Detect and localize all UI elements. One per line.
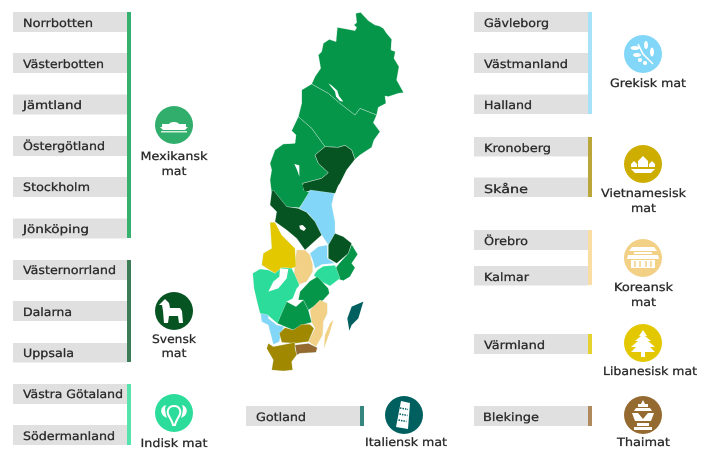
region: Västernorrland [303, 145, 355, 191]
heading: Mexikansk mat [140, 149, 208, 178]
heading: Grekisk mat: Grekisk mat [610, 76, 687, 90]
heading: Mexikansk mat: mat [162, 164, 187, 178]
heading: Koreansk mat: mat [631, 295, 657, 309]
label: Jämtland: Jämtland [22, 98, 82, 112]
region: Örebro [294, 250, 313, 284]
label: Gävleborg: Gävleborg [484, 16, 549, 30]
heading: Mexikansk mat: Mexikansk [140, 149, 208, 163]
label: Västmanland: Västmanland [484, 57, 568, 71]
heading: Vietnamesisk mat: mat [631, 201, 657, 215]
heading: Indisk mat: Indisk mat [140, 436, 208, 450]
icon: olive branch [624, 35, 662, 73]
icon: Indisk domes [155, 394, 193, 432]
map of Sweden [253, 12, 404, 371]
group: Vietnamesisk mat list [474, 137, 592, 197]
colour bar [360, 406, 364, 426]
group: Svensk mat list [13, 260, 131, 362]
region: Kronoberg [279, 324, 314, 343]
label: Kronoberg: Kronoberg [484, 141, 551, 155]
group: Grekisk mat list [474, 12, 592, 114]
colour bar [588, 137, 592, 197]
heading: Italiensk mat: Italiensk mat [365, 435, 448, 449]
region: Västmanland [310, 245, 335, 268]
region: Öland [324, 320, 333, 348]
icon: Korean palace [624, 239, 662, 277]
label: Värmland: Värmland [484, 338, 545, 352]
region: Gotland [347, 302, 363, 331]
region: Jämtland lower [271, 185, 309, 208]
heading: Vietnamesisk mat [601, 186, 686, 215]
heading: Libanesisk mat: Libanesisk mat [603, 364, 698, 378]
region: Östergötland [298, 277, 329, 310]
lake: Siljan [299, 225, 306, 231]
region: Halland [261, 313, 284, 344]
region: Stockholm [334, 244, 358, 281]
icon: Dalecarlian horse [155, 292, 193, 330]
region: Västerbotten [298, 84, 380, 159]
region: Västra Götaland [253, 268, 299, 323]
lake: Storsjön [294, 164, 299, 177]
colour bar [127, 384, 131, 445]
group: Indisk mat list [13, 384, 131, 445]
icon: Leaning tower of Pisa [385, 396, 423, 434]
lake: Hornavan [328, 83, 343, 102]
icon: Vietnamese boat [624, 145, 662, 183]
label: Stockholm [13, 177, 127, 197]
label: Gotland: Gotland [256, 410, 306, 424]
label: Västernorrland: Västernorrland [23, 263, 116, 277]
icon: Mexikansk sombrero [155, 106, 193, 144]
label: Östergötland: Östergötland [23, 139, 105, 153]
group: Gotland list [246, 406, 364, 426]
heading: Svensk mat [152, 332, 196, 360]
label: Jönköping: Jönköping [22, 222, 89, 236]
heading: Thaimat: Thaimat [616, 435, 671, 449]
label: Norrbotten [13, 12, 127, 32]
heading: Svensk mat: mat [162, 346, 187, 360]
region: Jämtland [270, 117, 328, 193]
label: Kalmar: Kalmar [484, 270, 529, 284]
heading: Svensk mat: Svensk [152, 332, 196, 346]
label: Västerbotten: Västerbotten [23, 57, 104, 71]
label: Dalarna: Dalarna [23, 305, 72, 319]
icon: Thai temple [624, 396, 662, 434]
label: Västra Götaland: Västra Götaland [23, 387, 123, 401]
region: Västernorrland lower [303, 185, 338, 193]
colour bar [588, 406, 592, 426]
heading: Vietnamesisk mat: Vietnamesisk [601, 186, 686, 200]
region: Gävleborg [299, 190, 335, 245]
label: Stockholm: Stockholm [23, 180, 90, 194]
heading: Koreansk mat [614, 280, 673, 309]
region: Södermanland [314, 265, 340, 286]
label: Skåne: Skåne [484, 182, 528, 196]
group: Mexikansk mat list [13, 12, 131, 238]
region: Kalmar [308, 300, 327, 347]
label: Halland: Halland [484, 98, 532, 112]
group: Koreansk mat list [474, 230, 592, 286]
label: Uppsala: Uppsala [23, 346, 74, 360]
label: Jämtland [13, 94, 127, 114]
lake: Vättern [292, 284, 301, 308]
colour bar [588, 230, 592, 285]
region: Dalarna [270, 190, 322, 250]
label: Södermanland: Södermanland [23, 429, 115, 443]
lake: Mälaren [315, 263, 339, 271]
lake: Vänern [268, 268, 288, 292]
colour bar [127, 260, 131, 362]
region: Uppsala [328, 233, 352, 263]
region: Skåne [267, 342, 297, 371]
region: Jönköping [277, 300, 312, 330]
colour bar [588, 12, 592, 114]
group: Libanesisk mat list [474, 334, 592, 354]
colour bar [127, 12, 131, 238]
label: Jönköping [13, 218, 127, 238]
group: Thaimat list [474, 406, 592, 426]
colour bar [588, 334, 592, 354]
region: Blekinge [295, 343, 317, 355]
label: Västerbotten [13, 53, 127, 73]
label: Örebro: Örebro [484, 234, 528, 248]
icon: cedar tree [624, 324, 662, 362]
label: Blekinge: Blekinge [483, 410, 539, 424]
label: Norrbotten: Norrbotten [23, 16, 93, 30]
region: Värmland [262, 222, 296, 273]
heading: Koreansk mat: Koreansk [614, 280, 673, 294]
region: Norrbotten [312, 12, 404, 115]
label: Östergötland [13, 136, 127, 156]
